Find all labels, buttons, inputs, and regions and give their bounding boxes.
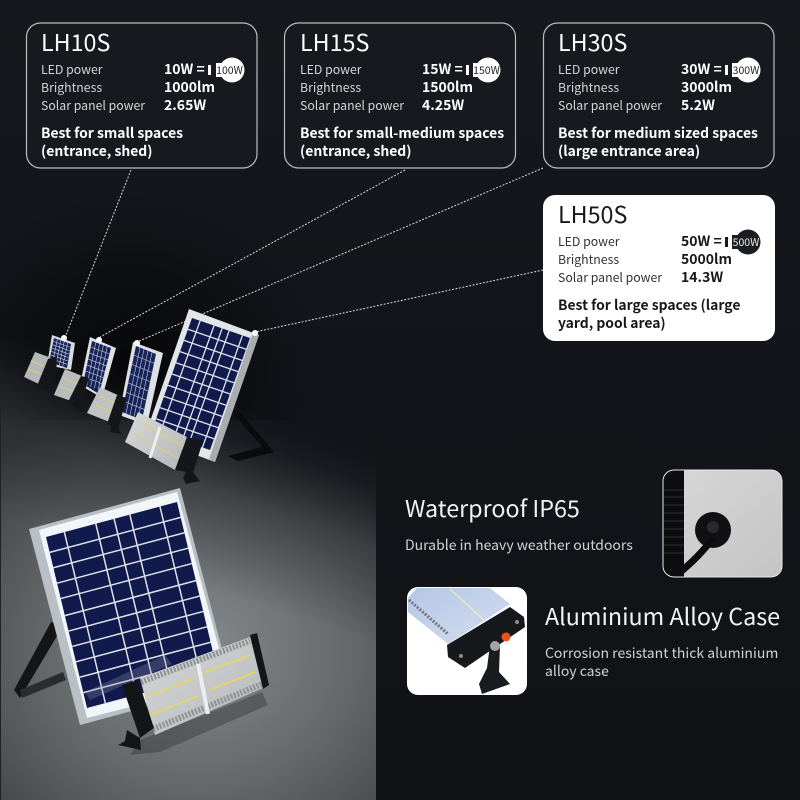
card: LH10S: Brightness bbox=[41, 78, 102, 96]
product: featured panel with stand bbox=[14, 488, 231, 725]
card: LH30S: 30W = bbox=[681, 59, 722, 79]
card: LH15S: Best for small-medium spaces bbox=[300, 123, 504, 143]
card: LH30S bbox=[544, 23, 774, 168]
card: LH50S: LH50S bbox=[558, 196, 627, 230]
card: LH30S: Brightness bbox=[558, 78, 619, 96]
card: LH30S: Solar panel power bbox=[558, 96, 662, 114]
text: waterproof description: Durable in heavy weather outdoors bbox=[405, 535, 633, 555]
card: LH15S: (entrance, shed) bbox=[300, 141, 412, 161]
card: LH15S: 1500lm bbox=[422, 77, 473, 97]
card: LH10S: Solar panel power bbox=[41, 96, 145, 114]
connector: LH15S bbox=[100, 170, 405, 337]
product: LH30S panel and lamp bbox=[87, 342, 163, 434]
card: LH50S: Brightness bbox=[558, 250, 619, 268]
thumbnail: aluminium case bbox=[407, 587, 527, 695]
card: LH50S: 14.3W bbox=[681, 267, 723, 287]
card: LH30S: (large entrance area) bbox=[558, 141, 700, 161]
text: aluminium description: alloy case bbox=[545, 661, 609, 681]
heading: aluminium: Aluminium Alloy Case bbox=[545, 598, 780, 632]
card: LH15S: 4.25W bbox=[422, 95, 464, 115]
card: LH10S bbox=[26, 23, 257, 168]
card: LH30S: 300W bbox=[733, 63, 759, 78]
card: LH10S: 1000lm bbox=[164, 77, 215, 97]
card: LH10S: 10W = bbox=[164, 59, 205, 79]
card: LH30S: 5.2W bbox=[681, 95, 715, 115]
card: LH10S: Best for small spaces bbox=[41, 123, 183, 143]
card: LH10S: 100W bbox=[216, 63, 243, 78]
card: LH10S: LED power bbox=[41, 60, 103, 78]
card: LH15S: LH15S bbox=[300, 24, 369, 58]
card: LH50S: 50W = bbox=[681, 231, 722, 251]
card: LH10S: LH10S bbox=[41, 24, 110, 58]
card: LH15S: LED power bbox=[300, 60, 362, 78]
product: LH50S panel and lamp bbox=[125, 309, 274, 484]
connector: LH50S bbox=[255, 270, 543, 332]
card: LH50S bbox=[543, 195, 775, 341]
product: LH15S panel and lamp bbox=[54, 337, 116, 412]
connector: LH10S bbox=[66, 170, 131, 335]
lit floor bbox=[0, 340, 376, 800]
text: aluminium description: Corrosion resistant thick aluminium bbox=[545, 643, 778, 663]
connector dots bbox=[61, 330, 258, 346]
card: LH50S: Solar panel power bbox=[558, 268, 662, 286]
card: LH30S: LED power bbox=[558, 60, 620, 78]
card: LH30S: LH30S bbox=[558, 24, 627, 58]
product: featured lamp bbox=[118, 633, 269, 755]
card: LH30S: 3000lm bbox=[681, 77, 732, 97]
card: LH50S: 5000lm bbox=[681, 249, 732, 269]
card: LH10S: (entrance, shed) bbox=[41, 141, 152, 161]
card: LH50S: 500W bbox=[733, 235, 759, 250]
card: LH15S: Brightness bbox=[300, 78, 361, 96]
heading: waterproof: Waterproof IP65 bbox=[405, 490, 580, 524]
card: LH30S: Best for medium sized spaces bbox=[558, 123, 758, 143]
connector: LH30S bbox=[137, 168, 543, 342]
card: LH15S: 150W bbox=[473, 63, 500, 78]
thumbnail: cable gland bbox=[663, 470, 782, 577]
product: LH10S panel and lamp bbox=[24, 335, 75, 392]
card: LH50S: Best for large spaces (large bbox=[558, 295, 740, 315]
card: LH50S: yard, pool area) bbox=[558, 313, 666, 333]
card: LH50S: LED power bbox=[558, 232, 620, 250]
card: LH15S: 15W = bbox=[422, 59, 463, 79]
card: LH15S bbox=[284, 23, 516, 168]
card: LH10S: 2.65W bbox=[164, 95, 206, 115]
card: LH15S: Solar panel power bbox=[300, 96, 404, 114]
